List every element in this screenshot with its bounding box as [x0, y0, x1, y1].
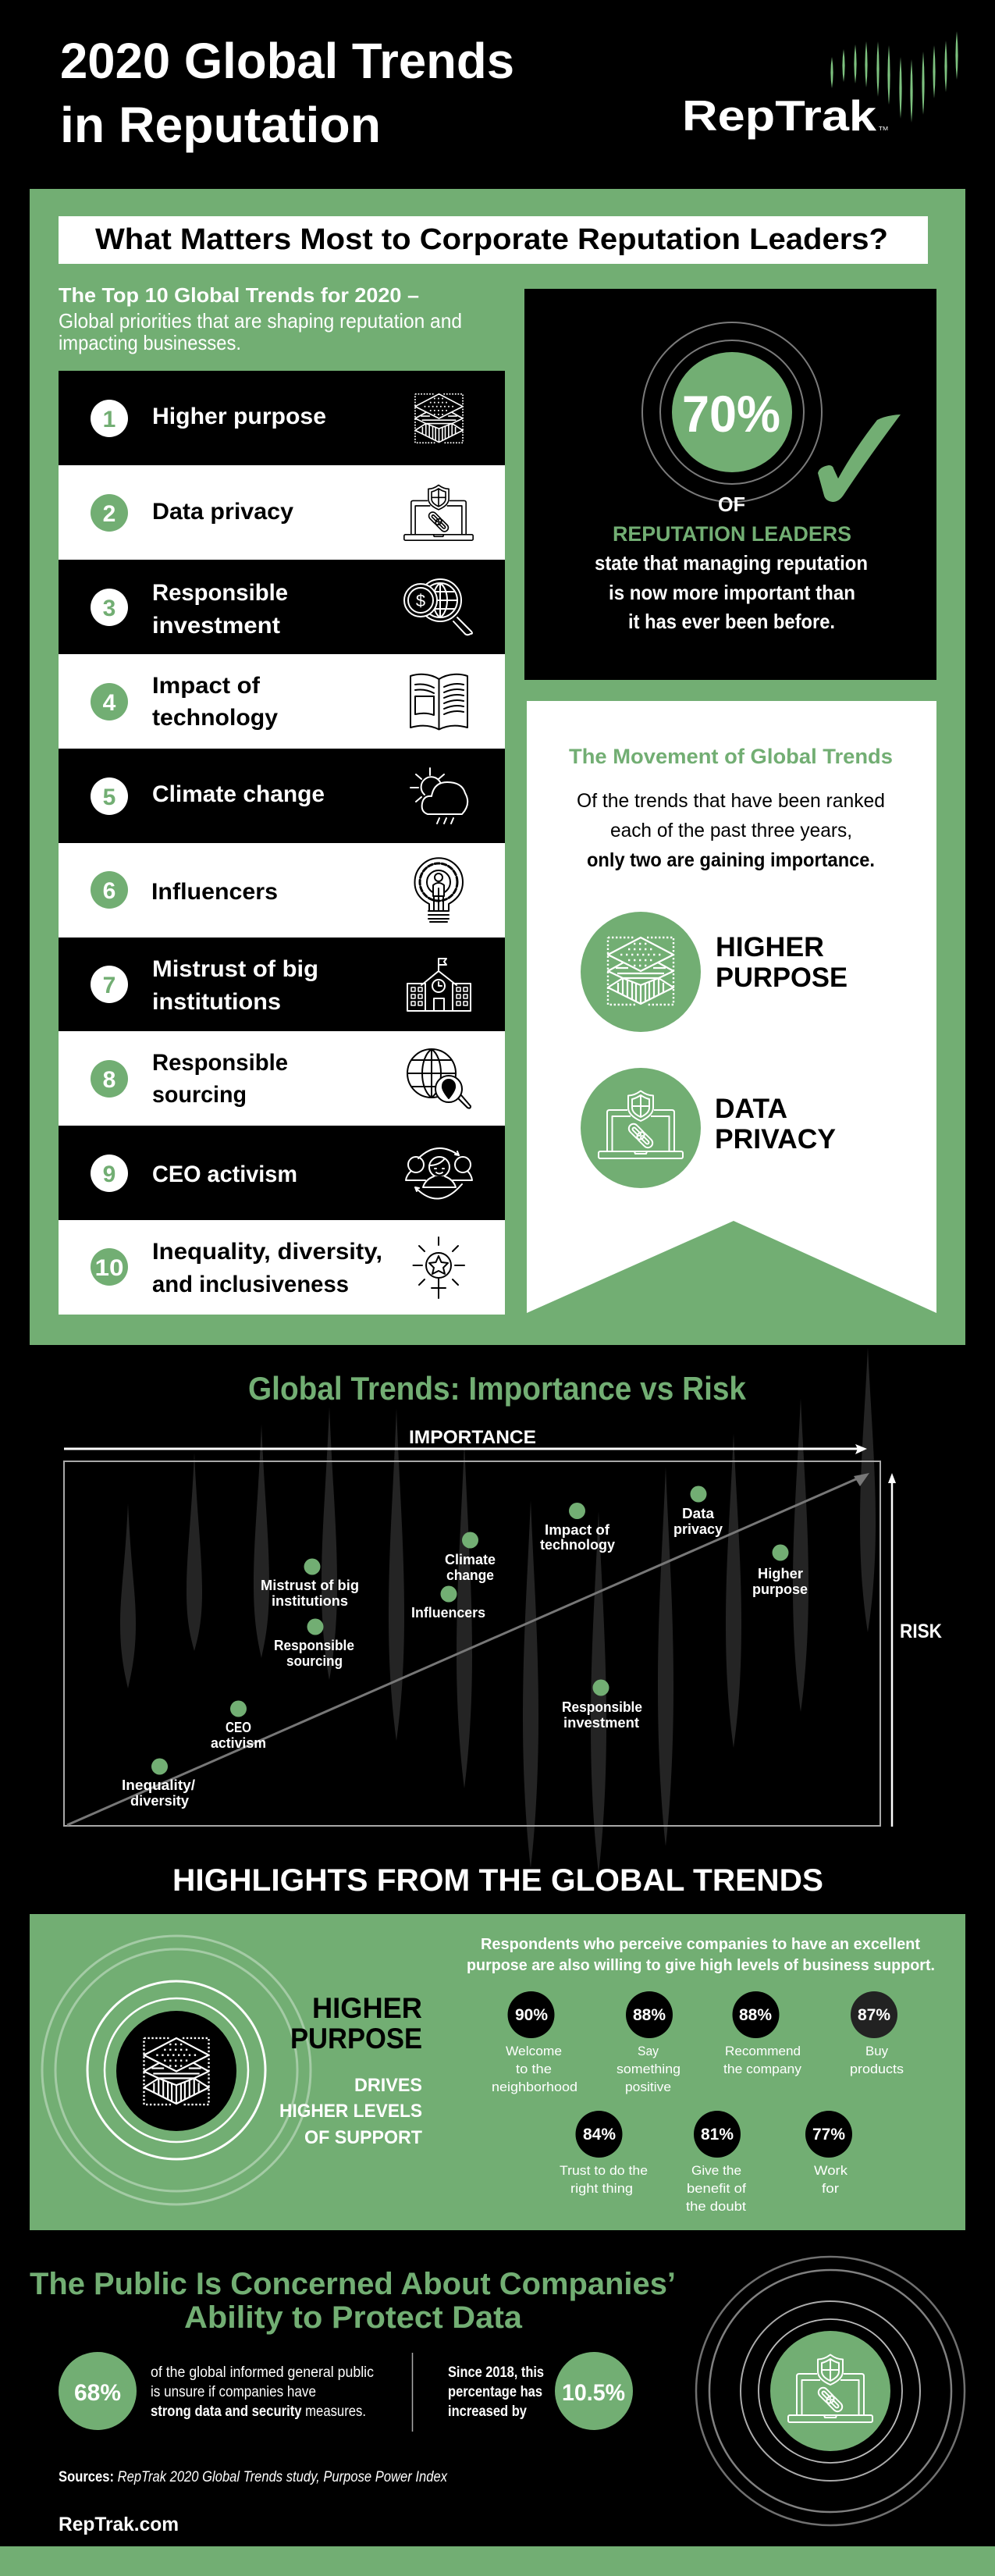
stat: 87% buy: products: [850, 2062, 904, 2076]
row 9: 9: [103, 1162, 115, 1187]
stat: 88% say something: Say: [638, 2044, 659, 2058]
row 7: Mistrust of big: [152, 956, 318, 982]
row 3: Responsible: [152, 580, 288, 606]
risk axis: RISK: [900, 1621, 942, 1642]
stat: 87% buy: Buy: [865, 2044, 888, 2058]
stat: 90% welcome: to the: [516, 2062, 552, 2076]
higher purpose item: HIGHER: [716, 932, 824, 962]
callout text: [595, 493, 868, 633]
stat: 84% trust: 84%: [583, 2126, 616, 2144]
row 6: Influencers: [151, 879, 278, 905]
stat: 68% unsure: strong data and security measures.: [151, 2403, 366, 2420]
row 6: [59, 843, 505, 938]
stat: 88% say something: positive: [625, 2080, 671, 2094]
point: ceo activism: CEO: [226, 1720, 251, 1735]
point: mistrust: [261, 1558, 359, 1609]
stat: 77% work for: 77%: [812, 2126, 845, 2144]
ring badge: higher purpose: [42, 1936, 311, 2204]
row 8: 8: [103, 1067, 115, 1093]
row 4: technology: [152, 705, 278, 731]
respondents statement: Respondents who perceive companies to have an excellent: [481, 1936, 920, 1953]
point: responsible investment: investment: [563, 1715, 639, 1731]
row 2: 2: [103, 501, 115, 527]
row 10: 10: [95, 1255, 123, 1281]
stat: 88% recommend: [723, 1991, 802, 2076]
row 1: [59, 371, 505, 465]
stat: 88% say something: something: [617, 2062, 681, 2076]
row 10: [59, 1220, 505, 1315]
row 2: Data privacy: [152, 499, 293, 525]
stat: 88% say something: 88%: [633, 2006, 666, 2024]
point: data privacy: [673, 1486, 723, 1537]
point: data privacy: privacy: [673, 1521, 723, 1537]
row 4: [59, 654, 505, 749]
ring badge: 70%: [682, 385, 780, 443]
logo: RepTrak: [682, 31, 958, 140]
row 4: 4: [103, 690, 116, 716]
point: higher purpose: Higher: [758, 1566, 803, 1582]
higher purpose statement: PURPOSE: [290, 2023, 422, 2055]
callout text: REPUTATION LEADERS: [613, 522, 851, 546]
callout text: is now more important than: [609, 581, 855, 604]
row 10: Inequality, diversity,: [152, 1239, 382, 1265]
higher purpose item: PURPOSE: [716, 962, 848, 993]
point: responsible sourcing: sourcing: [286, 1653, 343, 1669]
decorative chart spindles: [120, 1347, 876, 1873]
title: in Reputation: [60, 97, 381, 153]
heading: public concerned about data: [30, 2267, 676, 2335]
stat: 81% benefit of doubt: [686, 2111, 746, 2214]
logo signal bars: [830, 31, 958, 123]
logo: RepTrak: RepTrak: [682, 91, 876, 140]
panel: the movement of global trends: The Movement of Global Trends: [569, 745, 893, 768]
stat: 88% recommend: the company: [723, 2062, 802, 2076]
chart: importance vs risk: [64, 1427, 942, 1827]
row 5: 5: [103, 785, 115, 810]
stat: 88% say something: [617, 1991, 681, 2094]
movement description: each of the past three years,: [610, 820, 852, 841]
stat: 90% welcome: 90%: [515, 2006, 548, 2024]
point: data privacy: Data: [682, 1506, 715, 1521]
higher purpose statement: [279, 1992, 422, 2148]
higher purpose statement: DRIVES: [354, 2075, 422, 2096]
stat: 90% welcome: [492, 1991, 577, 2094]
movement description: [577, 790, 885, 871]
point: climate change: Climate: [445, 1552, 496, 1567]
heading: public concerned about data: The Public Is Concerned About Companies’: [30, 2267, 676, 2301]
heading: global trends importance vs risk: Global Trends: Importance vs Risk: [248, 1370, 747, 1407]
point: mistrust: institutions: [272, 1593, 348, 1609]
point: responsible investment: Responsible: [562, 1699, 642, 1715]
higher purpose statement: OF SUPPORT: [304, 2127, 422, 2148]
point: impact of technology: [540, 1503, 615, 1553]
title: [60, 33, 514, 153]
row 2: [59, 465, 505, 560]
row 3: investment: [152, 613, 280, 639]
stat: 10.5% increase: increased by: [448, 2403, 527, 2420]
row 3: 3: [103, 596, 115, 621]
stat: 68% unsure: of the global informed general public: [151, 2364, 374, 2381]
ring badge: [642, 322, 822, 502]
stat: 88% recommend: 88%: [739, 2006, 772, 2024]
point: climate change: [445, 1532, 496, 1583]
point: mistrust: Mistrust of big: [261, 1578, 359, 1593]
point: impact of technology: Impact of: [545, 1522, 610, 1538]
row 3: $: [416, 591, 425, 610]
row 3: [59, 560, 505, 654]
stat: 10.5% increase: percentage has: [448, 2384, 542, 2400]
callout text: state that managing reputation: [595, 551, 868, 575]
row 1: Higher purpose: [152, 404, 326, 429]
stat: 88% recommend: Recommend: [725, 2044, 801, 2058]
row 7: institutions: [152, 989, 281, 1015]
website: RepTrak.com: [59, 2514, 179, 2535]
row 10: and inclusiveness: [152, 1272, 349, 1297]
stat: 84% trust: right thing: [570, 2181, 633, 2196]
risk axis: [888, 1473, 942, 1827]
panel: higher purpose highlights: [30, 1914, 965, 2230]
footer band: [0, 2546, 995, 2576]
top 10 intro text: impacting businesses.: [59, 331, 241, 354]
stat: 10.5% increase: 10.5%: [562, 2380, 625, 2406]
stat: 81% benefit of doubt: 81%: [701, 2126, 734, 2144]
top 10 intro text: Global priorities that are shaping reputation and: [59, 309, 462, 333]
title: 2020 Global Trends: [60, 33, 514, 89]
row 5: [59, 749, 505, 843]
stat: 77% work for: Work: [814, 2163, 848, 2178]
top 10 intro text: [59, 283, 462, 354]
trend arrow: [67, 1473, 869, 1825]
stat: 87% buy: 87%: [858, 2006, 890, 2024]
data privacy item: [581, 1068, 836, 1188]
higher purpose statement: HIGHER LEVELS: [279, 2101, 422, 2122]
point: inequality: [122, 1758, 195, 1809]
stat: 68% unsure: is unsure if companies have: [151, 2384, 316, 2400]
data privacy item: PRIVACY: [715, 1124, 836, 1155]
row 5: Climate change: [152, 781, 325, 807]
point: impact of technology: technology: [540, 1537, 615, 1553]
stat: 10.5% increase: [448, 2352, 633, 2430]
point: inequality: Inequality/: [122, 1777, 195, 1793]
heading bar: What Matters Most to Corporate Reputation Leaders?: [95, 223, 888, 256]
respondents statement: [467, 1936, 935, 1974]
point: responsible sourcing: [274, 1619, 354, 1669]
top 10 intro text: The Top 10 Global Trends for 2020 –: [59, 283, 419, 307]
stat: 81% benefit of doubt: benefit of: [687, 2181, 746, 2196]
heading: highlights: HIGHLIGHTS FROM THE GLOBAL TRENDS: [172, 1863, 823, 1898]
panel: 70% callout: [524, 289, 936, 680]
respondents statement: purpose are also willing to give high levels of business support.: [467, 1957, 935, 1974]
point: ceo activism: [211, 1700, 266, 1751]
heading bar: [59, 216, 928, 264]
point: inequality: diversity: [130, 1793, 189, 1809]
movement description: Of the trends that have been ranked: [577, 790, 885, 812]
stat: 81% benefit of doubt: Give the: [691, 2163, 741, 2178]
importance axis: IMPORTANCE: [409, 1427, 536, 1448]
row 8: [59, 1031, 505, 1126]
point: influencers: Influencers: [411, 1605, 485, 1621]
stat: 90% welcome: Welcome: [506, 2044, 562, 2058]
row 8: sourcing: [152, 1082, 247, 1108]
row 7: [59, 938, 505, 1031]
stat: 10.5% increase: Since 2018, this: [448, 2364, 544, 2381]
stat: 84% trust: Trust to do the: [560, 2163, 648, 2178]
callout text: it has ever been before.: [628, 610, 835, 633]
stat: 84% trust: [560, 2111, 648, 2196]
stat: 77% work for: for: [822, 2181, 839, 2196]
point: influencers: [411, 1586, 485, 1621]
row 4: Impact of: [152, 673, 261, 699]
point: ceo activism: activism: [211, 1735, 266, 1751]
stat: 81% benefit of doubt: the doubt: [686, 2199, 746, 2214]
higher purpose statement: HIGHER: [312, 1992, 422, 2024]
panel: what matters most: [30, 189, 965, 1345]
sources: Sources: RepTrak 2020 Global Trends study, Purpose Power Index: [59, 2469, 448, 2485]
higher purpose item: [581, 912, 848, 1032]
row 6: 6: [103, 878, 115, 904]
row 9: [59, 1126, 505, 1220]
point: higher purpose: [752, 1544, 808, 1597]
data privacy item: DATA: [715, 1094, 787, 1124]
stat: 90% welcome: neighborhood: [492, 2080, 577, 2094]
importance axis: [64, 1427, 867, 1454]
panel: the movement of global trends: [527, 701, 936, 1313]
heading: public concerned about data: Ability to Protect Data: [184, 2300, 523, 2335]
stat: 68% unsure: [59, 2352, 374, 2430]
point: climate change: change: [446, 1567, 494, 1583]
callout text: OF: [718, 493, 745, 516]
logo: RepTrak: TM: [879, 126, 888, 132]
top 10 list: [59, 371, 505, 1315]
icon: check mark: [818, 415, 901, 502]
row 8: Responsible: [152, 1050, 288, 1076]
stat: 68% unsure: 68%: [74, 2380, 121, 2406]
row 7: 7: [103, 973, 115, 998]
point: higher purpose: purpose: [752, 1582, 808, 1597]
ring badge: data privacy: [696, 2257, 965, 2525]
stat: 77% work for: [805, 2111, 852, 2196]
point: responsible sourcing: Responsible: [274, 1638, 354, 1653]
row 9: CEO activism: [152, 1162, 297, 1187]
movement description: only two are gaining importance.: [587, 849, 875, 871]
row 1: 1: [103, 407, 115, 432]
point: responsible investment: [562, 1680, 642, 1731]
stat: 87% buy: [850, 1991, 904, 2076]
